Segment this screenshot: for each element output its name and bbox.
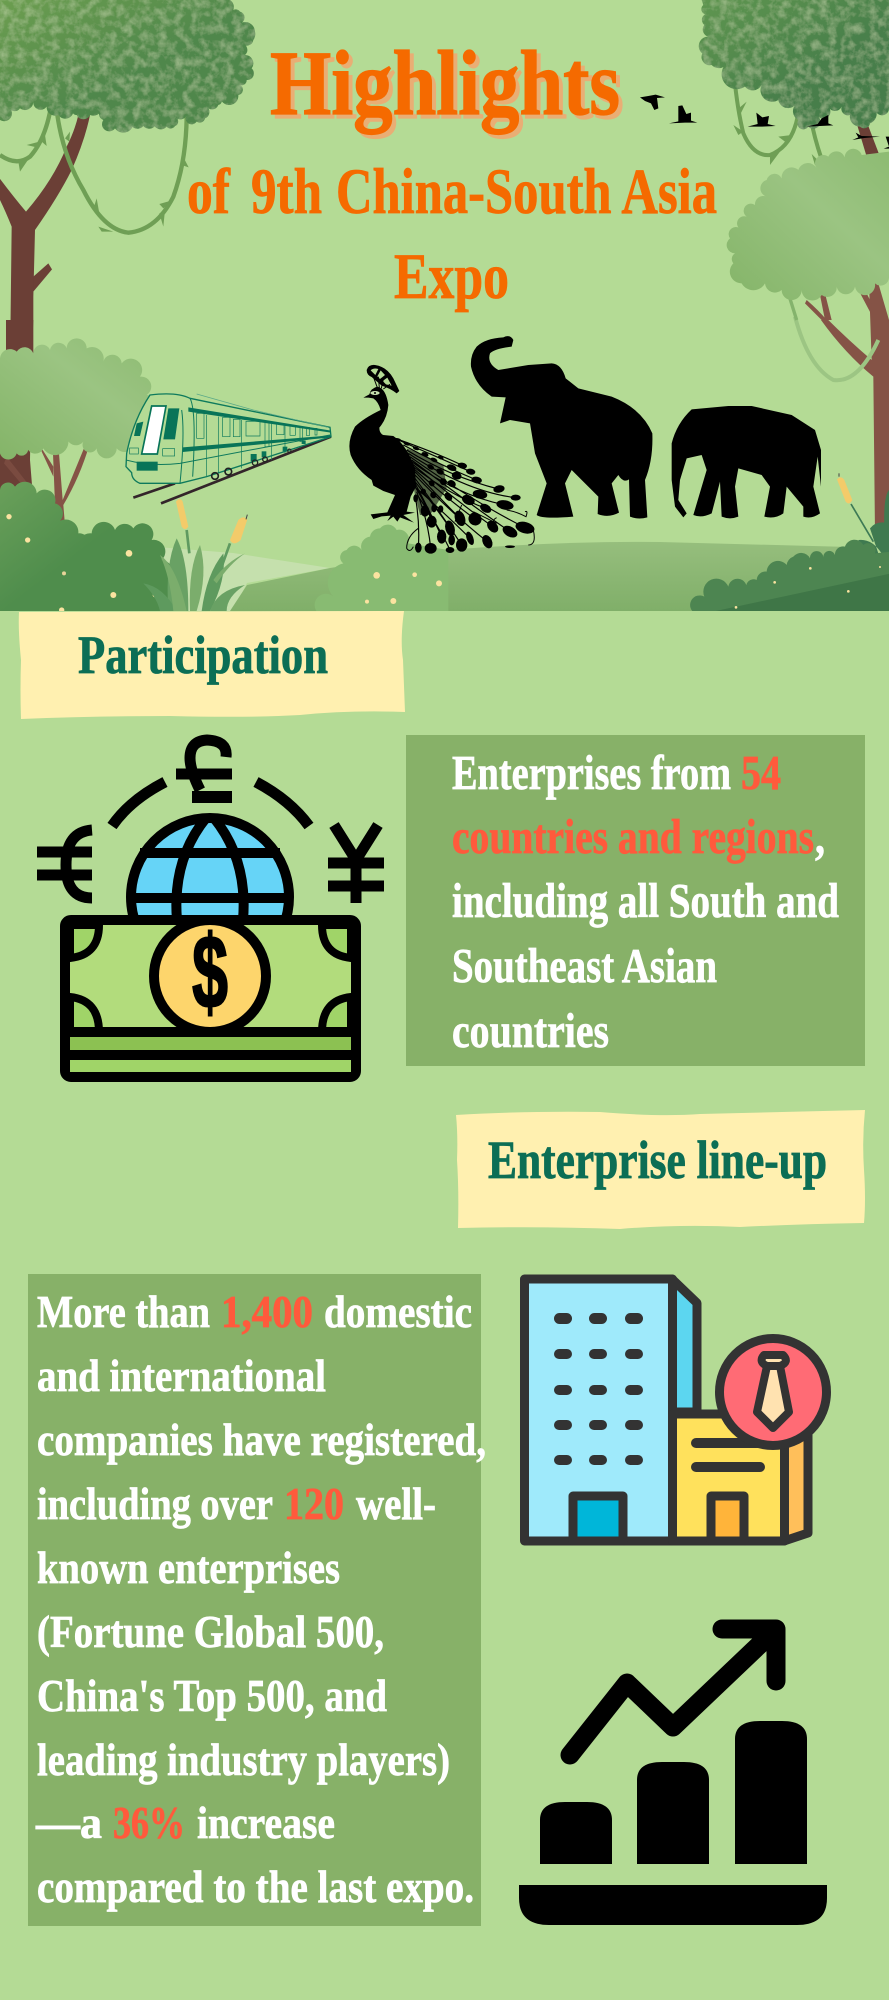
subtitle: Expo: [394, 241, 509, 313]
panel: participation text: [406, 735, 865, 1066]
panel: enterprise text: domestic: [324, 1286, 472, 1337]
subtitle: China-South Asia: [336, 156, 717, 228]
tree: mid right: [727, 149, 889, 533]
subtitle: 9th: [251, 156, 322, 228]
tree: top right: [699, 0, 889, 168]
icon part: badge: [720, 1338, 826, 1446]
peacock crest: [367, 365, 399, 393]
panel: enterprise text: and international: [37, 1350, 326, 1401]
icon part: tower door: [573, 1496, 623, 1541]
icon part: windows: [554, 1313, 643, 1465]
icon part: annex lines: [696, 1443, 770, 1467]
peacock: [349, 365, 536, 554]
panel: enterprise text: companies have registered,: [37, 1414, 486, 1465]
icon: growth chart: [519, 1629, 827, 1925]
icon part: yen: [328, 825, 384, 903]
elephant: large trunk raised: [471, 336, 652, 519]
icon part: banknote: [65, 920, 356, 1077]
panel: enterprise text: well-: [356, 1478, 436, 1529]
birds: [640, 95, 889, 149]
panel: participation text: Enterprises from: [452, 745, 731, 800]
panel: participation text: countries: [452, 1003, 609, 1058]
icon part: annex: [672, 1414, 784, 1541]
panel: enterprise text: increase: [197, 1797, 335, 1848]
icon: currencies, globe and banknote: [37, 740, 384, 1077]
bush: centre right light: [315, 525, 448, 613]
icon part: tie: [757, 1355, 789, 1428]
heading: Participation: [19, 611, 405, 719]
heading: Participation: Participation: [78, 625, 328, 685]
panel: enterprise text: —a: [35, 1797, 102, 1848]
icon part: bars: [540, 1721, 807, 1864]
panel: enterprise text: 1,400: [221, 1286, 313, 1337]
panel: enterprise text: More than: [37, 1286, 210, 1337]
icon part: dollar coin: $: [192, 915, 228, 1031]
panel: enterprise text: [28, 1274, 486, 1926]
panel: hero illustration: [0, 0, 889, 613]
train: [126, 394, 331, 503]
icon part: euro: [37, 830, 92, 898]
panel: enterprise text: including over: [37, 1478, 273, 1529]
icon part: globe: [131, 818, 289, 976]
panel: enterprise text: 36%: [113, 1797, 185, 1848]
panel: participation text: countries and regions: [452, 809, 814, 864]
icon part: tower side: [672, 1279, 697, 1412]
icon part: annex door: [711, 1496, 744, 1541]
panel: enterprise text: China's Top 500, and: [37, 1670, 387, 1721]
title: Highlights: Highlights: [270, 32, 620, 134]
bush: bottom right with cattail: [690, 473, 889, 613]
panel: enterprise text: (Fortune Global 500,: [37, 1606, 384, 1657]
plant with cattails: [143, 499, 247, 611]
tree: top left: [0, 0, 255, 367]
panel: enterprise text: leading industry players): [37, 1734, 450, 1785]
subtitle: [187, 156, 717, 313]
panel: participation text: ,: [815, 809, 825, 864]
panel: participation text: Southeast Asian: [452, 938, 717, 993]
title: Highlights: Highlights: [274, 36, 624, 138]
subtitle: of: [187, 156, 231, 228]
panel: enterprise text: known enterprises: [37, 1542, 340, 1593]
elephant: small trunk down: [672, 406, 821, 518]
icon: office buildings: [524, 1279, 826, 1541]
heading: Enterprise line-up: [456, 1110, 865, 1229]
bushes: bottom left: [0, 482, 172, 613]
icon part: annex side: [784, 1412, 808, 1541]
icon part: dollar coin: [154, 915, 266, 1032]
icon part: arcs: [112, 782, 309, 826]
icon part: pound: [176, 740, 232, 797]
tree: mid left: [0, 320, 155, 533]
panel: participation text: 54: [741, 745, 781, 800]
peacock tail feathers: [395, 437, 536, 554]
icon part: trend arrow: [570, 1629, 776, 1755]
icon part: tower: [524, 1279, 672, 1541]
panel: enterprise text: 120: [284, 1478, 344, 1529]
hills: [164, 542, 841, 611]
icon part: base: [519, 1885, 827, 1925]
peacock body and neck: [349, 387, 416, 523]
panel: enterprise text: compared to the last expo.: [37, 1861, 474, 1912]
